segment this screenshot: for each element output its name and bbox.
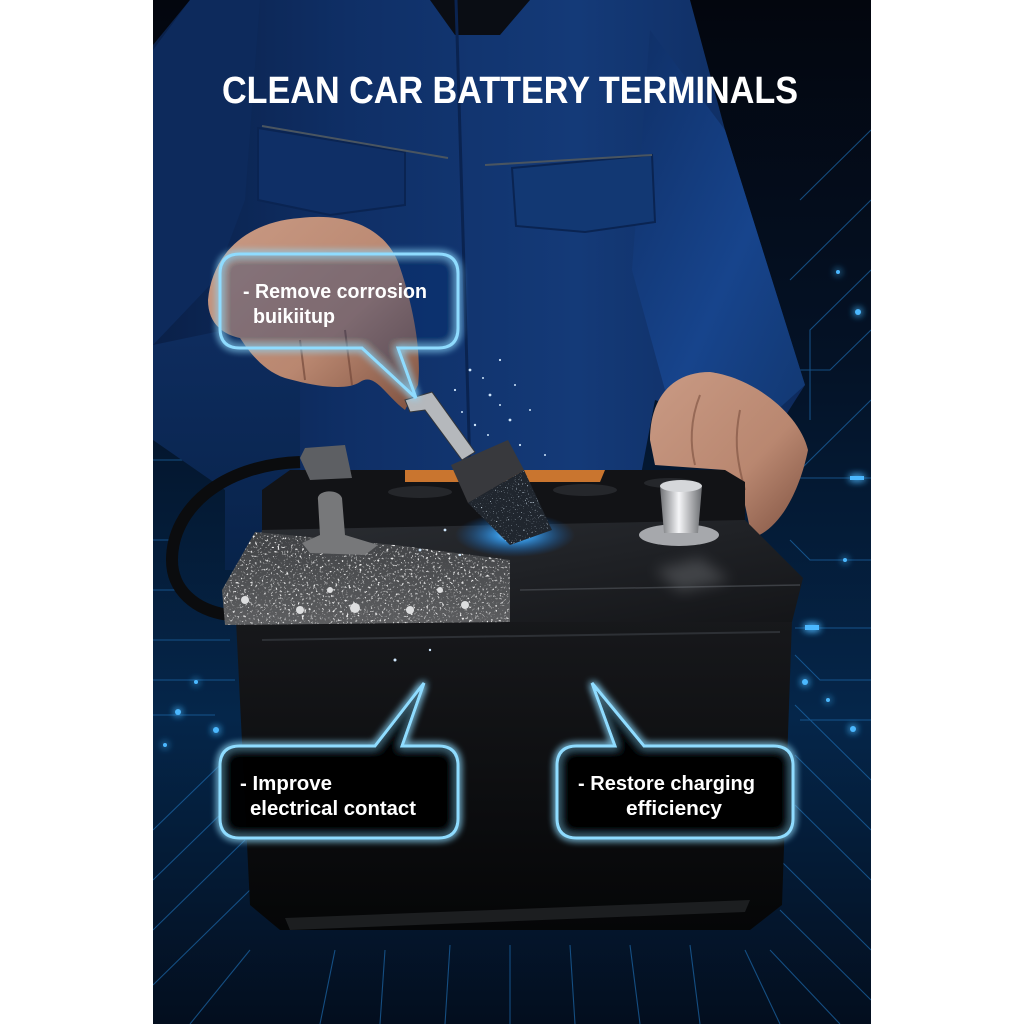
right chest pocket: [512, 155, 655, 232]
poster background: [153, 0, 871, 1024]
callout: restore charging: - Restore charging: [578, 773, 755, 795]
callout: remove corrosion: [220, 254, 458, 398]
callout: restore charging: [557, 683, 793, 838]
placket: [456, 0, 470, 470]
callout: restore charging: efficiency: [626, 798, 723, 820]
callout: improve contact: electrical contact: [250, 798, 416, 820]
collar shadow: [430, 0, 530, 35]
right hand: [650, 372, 808, 538]
left chest pocket: [258, 128, 405, 215]
debris particles: [394, 359, 546, 662]
centre glow line: [510, 545, 512, 880]
battery top cap: [240, 470, 803, 622]
battery cable: [172, 462, 300, 615]
circuit pattern: [153, 130, 871, 1024]
wire brush tool: [405, 392, 552, 545]
right sleeve: [632, 76, 805, 407]
callout: improve contact: - Improve: [240, 773, 332, 795]
clean terminal: [639, 480, 730, 592]
left hand: [208, 217, 419, 410]
lower left coverall: [153, 330, 300, 570]
callout: improve contact: [220, 683, 458, 838]
mechanic torso: [153, 0, 805, 570]
callout: remove corrosion: buikiitup: [253, 306, 335, 328]
battery body: [236, 620, 792, 930]
title: CLEAN CAR BATTERY TERMINALS: [222, 70, 798, 112]
left sleeve: [153, 0, 230, 344]
callout: remove corrosion: - Remove corrosion: [243, 281, 427, 303]
corroded half: [222, 445, 510, 625]
circuit nodes: [163, 270, 864, 747]
